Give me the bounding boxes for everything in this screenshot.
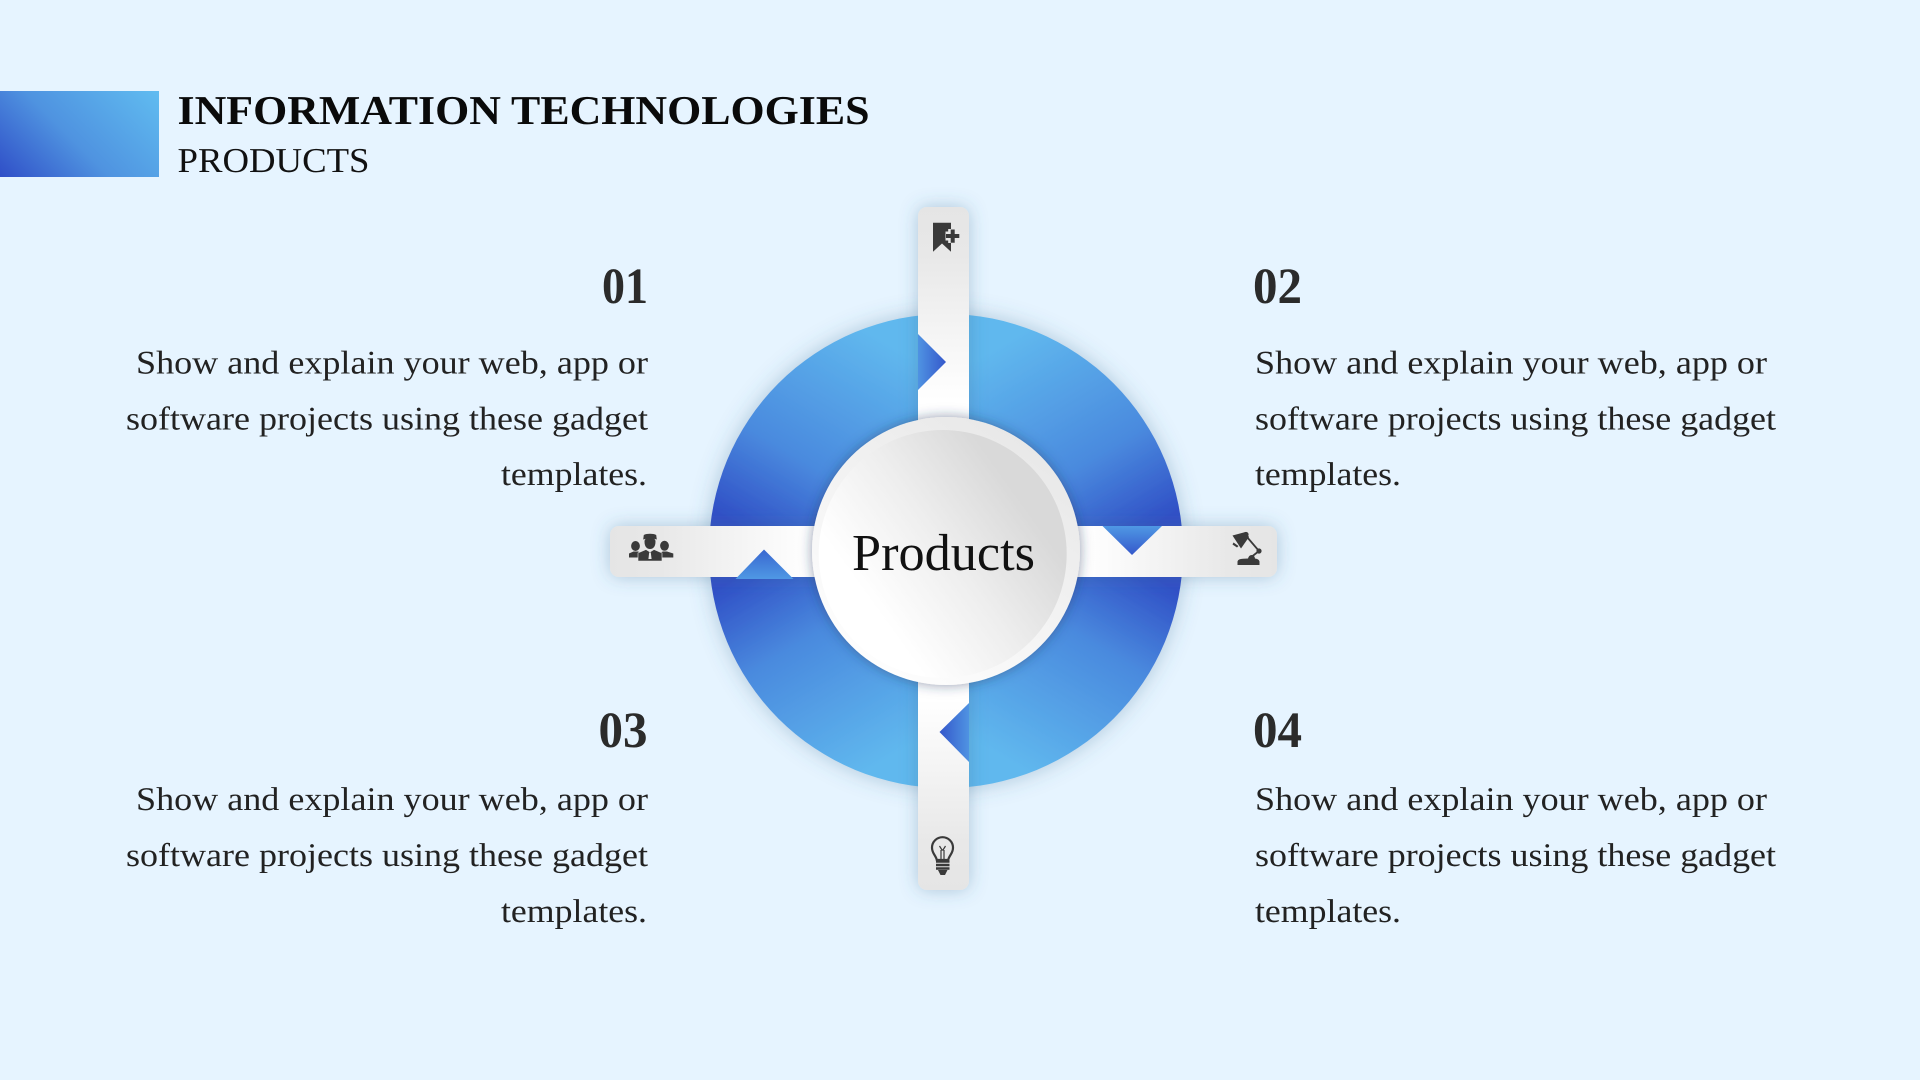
item 03 text: 03 bbox=[598, 703, 648, 759]
item 04 text: templates. bbox=[1255, 894, 1401, 930]
icon: desk lamp bbox=[1232, 532, 1262, 565]
item 02 text: Show and explain your web, app or bbox=[1255, 346, 1767, 382]
item 04 text: 04 bbox=[1253, 703, 1302, 759]
item 01 text: Show and explain your web, app or bbox=[136, 346, 648, 382]
arm: right bbox=[1000, 526, 1277, 577]
marker: right triangle bbox=[1102, 526, 1162, 555]
arm: top bbox=[918, 207, 969, 507]
item 03 text: software projects using these gadget bbox=[126, 838, 648, 874]
item 02 text: templates. bbox=[1255, 457, 1401, 493]
title: INFORMATION TECHNOLOGIES bbox=[178, 87, 870, 133]
item 04 text: Show and explain your web, app or bbox=[1255, 782, 1767, 818]
icon: light bulb bbox=[932, 837, 953, 875]
arm: left bbox=[610, 526, 890, 577]
blue circle with four gradient quadrants bbox=[709, 314, 1183, 788]
header accent block bbox=[0, 91, 159, 177]
item 02 text bbox=[1253, 259, 1776, 493]
item 02 text: 02 bbox=[1253, 259, 1302, 315]
icon: bookmark plus bbox=[933, 223, 960, 252]
item 01 text bbox=[126, 259, 648, 493]
item 01 text: 01 bbox=[602, 259, 648, 315]
center disc bbox=[812, 417, 1080, 685]
arm: bottom bbox=[918, 600, 969, 890]
item 03 text: templates. bbox=[501, 894, 647, 930]
item 01 text: software projects using these gadget bbox=[126, 402, 648, 438]
center label: Products bbox=[852, 525, 1035, 582]
item 02 text: software projects using these gadget bbox=[1255, 402, 1776, 438]
marker: bottom triangle bbox=[940, 703, 969, 762]
marker: left triangle bbox=[736, 550, 794, 579]
icon: team of people bbox=[629, 534, 673, 561]
item 03 text: Show and explain your web, app or bbox=[136, 782, 648, 818]
item 04 text bbox=[1253, 703, 1776, 930]
item 04 text: software projects using these gadget bbox=[1255, 838, 1776, 874]
item 03 text bbox=[126, 703, 648, 930]
marker: top triangle bbox=[918, 334, 946, 390]
item 01 text: templates. bbox=[501, 457, 647, 493]
subtitle: PRODUCTS bbox=[178, 141, 370, 180]
